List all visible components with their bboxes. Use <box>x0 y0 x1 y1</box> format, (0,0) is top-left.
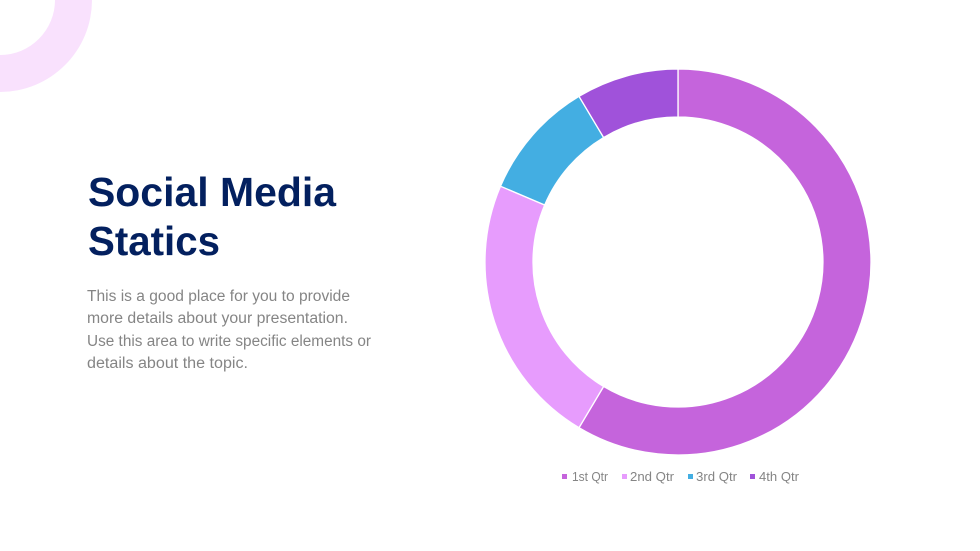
body text: This is a good place for you to provide <box>87 288 350 305</box>
legend <box>562 470 799 484</box>
donut chart <box>485 69 871 455</box>
decorative quarter ring <box>0 0 92 92</box>
segment: 3rd Qtr <box>500 96 604 205</box>
title: Social Media <box>88 169 337 215</box>
segment: 2nd Qtr <box>485 186 604 428</box>
body text: Use this area to write specific elements or <box>87 333 371 350</box>
legend item: 1st Qtr: 1st Qtr <box>572 470 608 484</box>
title <box>88 169 337 264</box>
legend item: 4th Qtr: 4th Qtr <box>759 470 799 484</box>
segment: 1st Qtr <box>579 69 871 455</box>
legend item: 2nd Qtr: 2nd Qtr <box>630 470 674 484</box>
segment: 4th Qtr <box>579 69 678 138</box>
body text: details about the topic. <box>87 355 248 372</box>
legend item: 3rd Qtr: 3rd Qtr <box>696 470 737 484</box>
title: Statics <box>88 218 220 264</box>
body text: more details about your presentation. <box>87 310 348 327</box>
body text <box>87 288 371 372</box>
